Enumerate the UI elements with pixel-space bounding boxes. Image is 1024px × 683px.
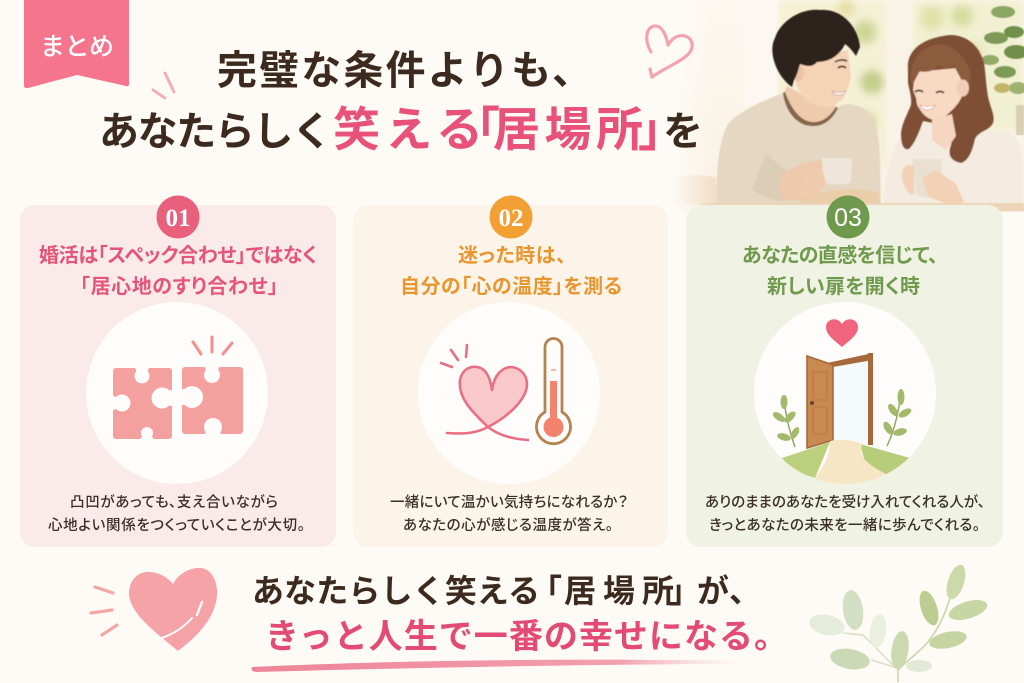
icon: thermometer — [536, 338, 570, 444]
closing message: きっと人生で一番の幸せになる。 — [265, 618, 788, 656]
woman mug — [912, 159, 942, 197]
title: あなたらしく — [99, 110, 332, 154]
decoration: sparkle lines by title — [153, 73, 174, 98]
title: 「 — [453, 103, 500, 156]
sofa cushion — [682, 175, 717, 205]
title: を — [663, 110, 703, 154]
badge 03 — [826, 196, 870, 238]
badge 02 — [490, 196, 532, 238]
heading 03: あなたの直感を信じて、 — [742, 243, 938, 267]
icon: puzzle pieces — [111, 337, 243, 441]
icon: ribbon heart — [441, 345, 528, 440]
heading 02: 自分の「心の温度」を測る — [400, 275, 622, 298]
closing message: 」 — [669, 573, 701, 609]
illustration circle — [754, 302, 936, 484]
decoration: watercolor leaves — [807, 562, 990, 682]
heading 03: 新しい扉を開く時 — [767, 275, 920, 298]
closing message: あなたらしく笑える — [252, 573, 540, 609]
sunlit table edge — [800, 189, 880, 203]
heading 02: 迷った時は、 — [458, 244, 566, 267]
body 03: きっとあなたの未来を一緒に歩んでくれる。 — [709, 517, 980, 534]
heading 01: 婚活は「スペック合わせ」ではなく — [39, 244, 317, 267]
icon: heart above door — [826, 319, 858, 347]
illustration circle — [418, 302, 600, 484]
woman — [900, 34, 994, 204]
title: 完璧な条件よりも、 — [217, 49, 592, 93]
plant — [981, 6, 1024, 135]
icon: open door and path — [782, 353, 910, 490]
closing message: が、 — [697, 573, 761, 609]
body 02: あなたの心が感じる温度が答え。 — [403, 516, 613, 534]
title: 笑える — [333, 103, 483, 156]
panel: 02 orange — [353, 196, 668, 547]
window frames — [772, 4, 777, 96]
man mug — [822, 158, 852, 184]
badge 01 — [156, 196, 200, 238]
body 03: ありのままのあなたを受け入れてくれる人が、 — [705, 493, 985, 511]
body 01: 心地よい関係をつくっていくことが大切。 — [48, 516, 305, 534]
heading 01: 「居心地のすり合わせ」 — [80, 275, 278, 298]
ribbon label: まとめ: まとめ — [40, 33, 114, 61]
man — [717, 10, 881, 208]
title: 居場所 — [493, 103, 643, 156]
illustration circle — [86, 302, 268, 484]
photo: couple with mugs by the window — [670, 0, 1024, 214]
body 02: 一緒にいて温かい気持ちになれるか？ — [390, 494, 628, 511]
closing message — [252, 573, 788, 656]
icon: hand-drawn heart — [647, 26, 692, 77]
body 01: 凸凹があっても、支え合いながら — [70, 493, 278, 511]
title: 」 — [638, 103, 685, 156]
closing message: 居場所 — [564, 573, 674, 609]
title — [99, 49, 703, 156]
icon: left sprig — [771, 395, 801, 447]
icon: right sprig — [881, 389, 913, 446]
closing message: 「 — [530, 573, 562, 609]
panel: 03 green — [686, 196, 1003, 547]
icon: big heart with sparkle lines — [91, 568, 217, 651]
ribbon label: まとめ — [24, 0, 129, 88]
badge 02: 02 — [498, 205, 524, 232]
badge 01: 01 — [166, 205, 190, 232]
panel: 01 pink — [20, 196, 336, 547]
badge 03: 03 — [834, 204, 862, 232]
brush underline — [252, 660, 742, 672]
